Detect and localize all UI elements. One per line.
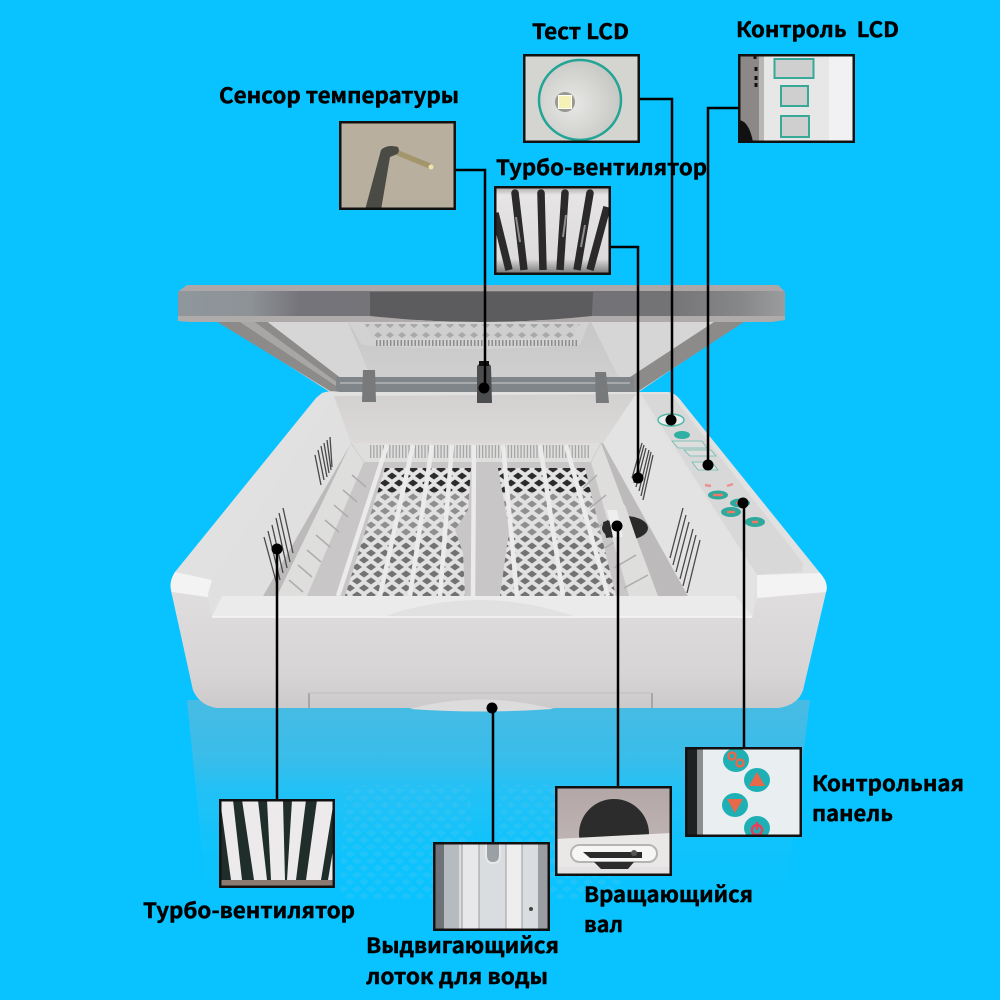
leader: water tray — [486, 702, 498, 843]
thumbnail: top fan — [494, 186, 611, 275]
thumbnail: water tray — [433, 842, 550, 931]
leader: LCD test — [639, 99, 676, 426]
lid hinges — [362, 370, 609, 403]
control panel strip — [641, 394, 803, 575]
sensor post — [477, 361, 492, 403]
label: rotating shaft — [584, 879, 753, 939]
label: LCD test: Тест LCD — [532, 16, 629, 46]
tray teeth — [370, 445, 590, 458]
thumbnail: bottom fan — [219, 799, 335, 888]
thumbnail: LED test — [523, 54, 640, 143]
panel buttons — [708, 490, 765, 527]
label: control panel: панель — [812, 798, 893, 828]
egg tray — [277, 443, 658, 596]
tray side ribs — [289, 475, 648, 592]
shaft bracket — [607, 510, 623, 537]
label: water tray: лоток для воды — [366, 961, 548, 991]
label: bottom fan: Турбо-вентилятор — [143, 895, 355, 925]
tray lattice — [340, 468, 620, 596]
leader: rotating shaft — [612, 520, 622, 787]
leader: top fan — [610, 247, 644, 484]
label: rotating shaft: вал — [584, 909, 623, 939]
vent slots: left wall — [264, 437, 332, 585]
leader: temperature sensor — [455, 170, 490, 394]
label: water tray — [366, 930, 559, 991]
LED test window — [658, 414, 684, 426]
vent slots: right wall — [632, 443, 700, 593]
thumbnail: LCD control — [738, 54, 855, 143]
leader: bottom fan — [272, 544, 282, 800]
tray rails — [338, 445, 608, 596]
rotating shaft opening — [602, 505, 648, 552]
label: rotating shaft: Вращающийся — [584, 879, 753, 909]
thumbnail: temperature sensor — [339, 121, 456, 210]
LCD windows — [672, 441, 718, 470]
label: temperature sensor: Сенсор температуры — [219, 80, 459, 110]
label: water tray: Выдвигающийся — [366, 930, 559, 960]
label: LCD control: Контроль LCD — [736, 14, 899, 44]
leader: LCD control — [702, 108, 739, 470]
lid glass reflection of tray — [265, 320, 717, 380]
thumbnail: rotating shaft — [555, 786, 672, 876]
leader: control panel — [738, 498, 748, 748]
thumbnail: control panel — [685, 747, 802, 837]
indicator marks — [705, 484, 733, 486]
product reflection — [187, 700, 810, 900]
label: control panel: Контрольная — [812, 768, 964, 798]
incubator body — [171, 391, 827, 712]
infographic: incubator parts — [143, 20, 962, 988]
incubator lid — [178, 285, 785, 396]
panel button — [674, 431, 690, 439]
label: control panel — [812, 768, 964, 828]
label: top fan: Турбо-вентилятор — [496, 152, 707, 182]
